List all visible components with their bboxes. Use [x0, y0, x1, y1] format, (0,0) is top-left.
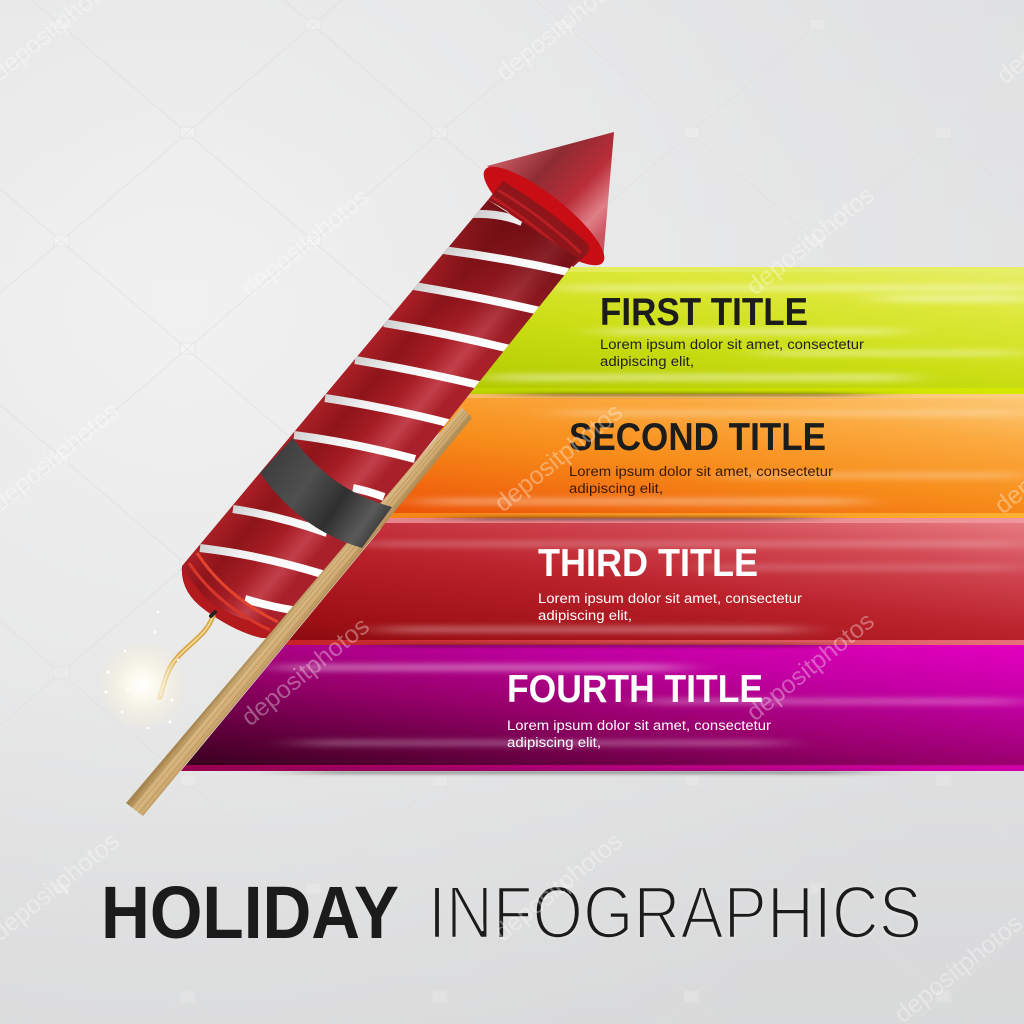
- watermarks: depositphotos: [489, 827, 628, 947]
- third body line 1: Lorem ipsum dolor sit amet, consectetur: [538, 591, 803, 606]
- fourth title: FOURTH TITLE: [507, 668, 763, 711]
- panel: first band: [470, 267, 1024, 394]
- second body line 2: adipiscing elit,: [569, 481, 663, 496]
- second title: SECOND TITLE: [569, 416, 826, 459]
- main title: INFOGRAPHICS: [428, 871, 922, 954]
- band bottom shadow: [300, 771, 860, 774]
- panel: second band: [389, 391, 1024, 518]
- rocket collar: [488, 181, 589, 267]
- rocket cone lip: [472, 153, 616, 279]
- third body line 2: adipiscing elit,: [538, 608, 632, 623]
- fourth body line 1: Lorem ipsum dolor sit amet, consectetur: [507, 718, 772, 733]
- first body line 1: Lorem ipsum dolor sit amet, consectetur: [600, 337, 865, 352]
- stick: [126, 407, 472, 816]
- spark glow: [97, 611, 189, 731]
- fourth body line 2: adipiscing elit,: [507, 735, 601, 750]
- panel: fourth band: [181, 642, 1024, 771]
- third title: THIRD TITLE: [538, 542, 758, 585]
- watermarks: depositphotos: [489, 398, 628, 518]
- first body line 2: adipiscing elit,: [600, 354, 694, 369]
- first title: FIRST TITLE: [600, 291, 808, 334]
- second body line 1: Lorem ipsum dolor sit amet, consectetur: [569, 464, 834, 479]
- panel: third band: [285, 514, 1024, 645]
- rocket body: [182, 200, 578, 638]
- rocket nose cone: [487, 132, 614, 260]
- tape band: [260, 438, 392, 548]
- watermarks: depositphotos: [236, 183, 375, 303]
- main title: HOLIDAY: [101, 871, 399, 954]
- watermarks: depositphotos: [741, 181, 880, 301]
- watermarks: depositphotos: [236, 612, 375, 732]
- white spiral stripes: [200, 214, 568, 610]
- main title: [101, 871, 922, 954]
- watermarks: depositphotos: [741, 607, 880, 727]
- rocket end bands: [182, 568, 276, 638]
- icon: firework rocket: [97, 132, 616, 816]
- fuse: [160, 612, 215, 697]
